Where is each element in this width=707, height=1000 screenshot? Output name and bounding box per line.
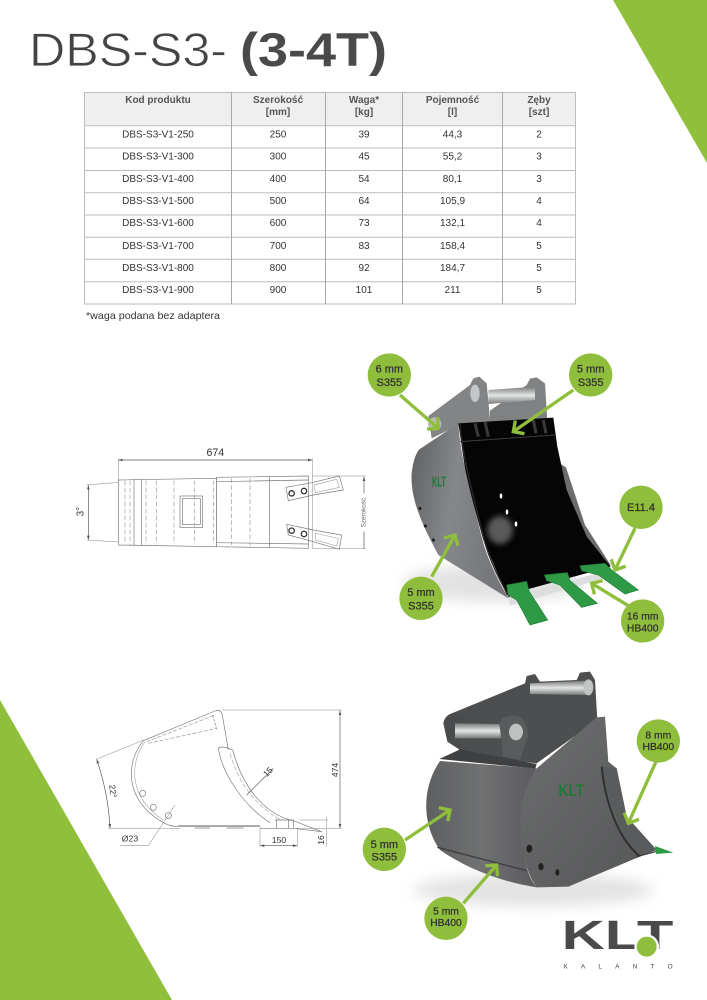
- bucket 1 with material callouts: [368, 353, 664, 643]
- table header text: [125, 95, 551, 118]
- title: (3-4T): [240, 23, 387, 76]
- table header text: [szt]: [529, 107, 549, 118]
- callout: 5 mm S355 top: [513, 353, 612, 432]
- bucket 2 shadow: [413, 873, 653, 907]
- callout: 5 mm S355: 5 mm: [371, 839, 398, 851]
- table header text: [l]: [448, 107, 457, 118]
- dimension: 15: 15: [261, 765, 275, 779]
- dimension: 15: [247, 765, 275, 795]
- table header text: [mm]: [266, 107, 290, 118]
- table body text: 184,7: [440, 263, 465, 274]
- callout: 6 mm S355: [368, 353, 438, 428]
- callout: E11.4: [615, 486, 663, 570]
- callout: 5 mm S355 top: S355: [578, 377, 603, 389]
- table body text: 54: [358, 174, 370, 185]
- dimension: 16: [300, 817, 328, 847]
- dimension: 474: 474: [330, 763, 340, 777]
- table body text: 132,1: [440, 218, 465, 229]
- callout: 5 mm HB400: HB400: [430, 918, 462, 929]
- table body text: 73: [358, 218, 370, 229]
- table body text: DBS-S3-V1-250: [122, 129, 194, 140]
- table header text: [kg]: [355, 107, 373, 118]
- technical drawing: top view: [76, 447, 367, 549]
- callout: 8 mm HB400: [628, 719, 680, 823]
- dimension: 474: [222, 710, 342, 828]
- callout: 5 mm S355 side: S355: [408, 600, 434, 612]
- callout: 5 mm S355: [363, 810, 450, 871]
- dimension: 22 degrees: [96, 740, 180, 828]
- table: product specifications: [84, 92, 576, 304]
- table body text: DBS-S3-V1-300: [122, 151, 194, 162]
- dimension: 22 degrees: 22°: [107, 784, 119, 798]
- footnote: *waga podana bez adaptera: [86, 310, 220, 322]
- table body text: DBS-S3-V1-900: [122, 285, 194, 296]
- table body text: 3: [536, 174, 542, 185]
- table body text: DBS-S3-V1-500: [122, 196, 194, 207]
- callout: 5 mm S355 side: [399, 535, 455, 620]
- technical drawing: side view: [96, 710, 342, 847]
- callout: 6 mm S355: S355: [377, 377, 402, 389]
- callout: 16 mm HB400: HB400: [627, 624, 659, 635]
- small bucket logo: KLT: [432, 475, 446, 491]
- title: DBS-S3-: [29, 23, 227, 76]
- table body text: 800: [270, 263, 287, 274]
- table body text: 101: [356, 285, 373, 296]
- dimension: diameter 23: Ø23: [122, 833, 138, 843]
- table body text: 700: [270, 241, 287, 252]
- table body text: [122, 129, 542, 296]
- table body text: 4: [536, 218, 542, 229]
- dimension: 674: 674: [206, 447, 224, 459]
- table body text: DBS-S3-V1-800: [122, 263, 194, 274]
- table body text: 3: [536, 151, 542, 162]
- logo: KLT Kalanto: [562, 912, 674, 971]
- table body text: DBS-S3-V1-400: [122, 174, 194, 185]
- table body text: 158,4: [440, 241, 465, 252]
- dimension: 674: [118, 447, 312, 548]
- dimension: 3 degrees: [76, 482, 118, 542]
- table body text: DBS-S3-V1-600: [122, 218, 194, 229]
- callout: 5 mm HB400: [424, 865, 497, 940]
- table body text: 105,9: [440, 196, 465, 207]
- table header text: Waga*: [349, 95, 379, 106]
- callout: 8 mm HB400: HB400: [643, 742, 674, 753]
- title: [29, 23, 387, 76]
- table body text: 64: [358, 196, 370, 207]
- bucket 1 teeth: [507, 563, 638, 625]
- table header text: Pojemność: [426, 95, 480, 106]
- dimension: 150: 150: [272, 835, 286, 845]
- table body text: 80,1: [443, 174, 463, 185]
- callout: 16 mm HB400: [592, 583, 664, 643]
- table header text: Zęby: [527, 95, 551, 106]
- callout: 16 mm HB400: 16 mm: [627, 611, 658, 622]
- table header text: Kod produktu: [125, 95, 191, 106]
- bucket 1 shadow: [403, 565, 583, 602]
- dimension: diameter 23: [120, 805, 175, 846]
- callout: E11.4: E11.4: [627, 502, 655, 514]
- table body text: 600: [270, 218, 287, 229]
- table header text: Szerokość: [253, 95, 303, 106]
- logo: KLT Kalanto: KLT: [562, 912, 674, 958]
- callout: 5 mm S355 top: 5 mm: [577, 364, 604, 376]
- table body text: 55,2: [443, 151, 463, 162]
- table body text: 5: [536, 241, 542, 252]
- table body text: 92: [358, 263, 370, 274]
- table body text: 5: [536, 285, 542, 296]
- table body text: 2: [536, 129, 542, 140]
- table body text: 300: [270, 151, 287, 162]
- table body text: 83: [358, 241, 370, 252]
- callout: 5 mm HB400: 5 mm: [433, 906, 459, 917]
- bucket 2 with material callouts: [363, 672, 680, 971]
- background corner: bottom left green triangle: [0, 700, 172, 1000]
- table body text: 4: [536, 196, 542, 207]
- logo: KLT Kalanto: KALANTO: [563, 964, 673, 971]
- callout: 5 mm S355: S355: [372, 852, 397, 864]
- table body text: 250: [270, 129, 287, 140]
- table body text: 400: [270, 174, 287, 185]
- table body text: 500: [270, 196, 287, 207]
- callout: 6 mm S355: 6 mm: [376, 364, 403, 376]
- table body text: DBS-S3-V1-700: [122, 241, 194, 252]
- table body text: 211: [445, 285, 461, 296]
- table header background: [84, 92, 576, 126]
- table body text: 5: [536, 263, 542, 274]
- table body text: 900: [270, 285, 287, 296]
- background corner: top right green triangle: [613, 0, 707, 163]
- small bucket logo: KLT: [558, 781, 584, 800]
- dimension: 150: [260, 827, 297, 847]
- dimension: width: [312, 476, 367, 549]
- table body text: 44,3: [443, 129, 463, 140]
- dimension: 16: 16: [316, 835, 326, 845]
- table body text: 45: [358, 151, 370, 162]
- table body text: 39: [358, 129, 370, 140]
- bucket 2 body: [426, 672, 673, 887]
- bucket 1 body: [412, 377, 611, 606]
- callout: 8 mm HB400: 8 mm: [645, 731, 671, 742]
- dimension: width: Szerokość: [360, 498, 367, 527]
- dimension: 3 degrees: 3°: [76, 507, 87, 516]
- callout: 5 mm S355 side: 5 mm: [407, 587, 435, 599]
